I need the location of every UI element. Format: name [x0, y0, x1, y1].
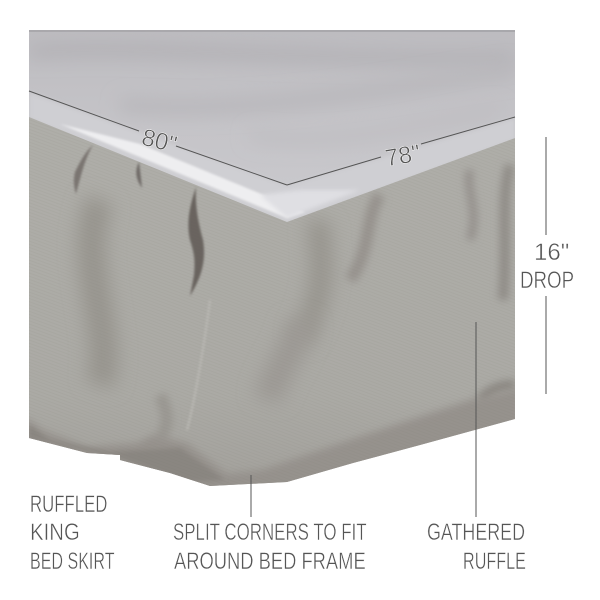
hem shadow [29, 390, 515, 486]
label: ruffled king bed skirt [30, 491, 115, 575]
white sheet hem [30, 94, 514, 172]
measurement: 80 inch width: 80" [139, 124, 180, 159]
measurement: 80 inch width [29, 91, 287, 185]
panel: gray gathered bed skirt [20, 110, 520, 500]
callout: split corners [173, 475, 367, 575]
label: ruffled king bed skirt: KING [30, 518, 80, 545]
measurement: 78 inch length [287, 117, 515, 185]
gather folds [74, 145, 515, 440]
measurement: 16 inch drop [520, 137, 574, 394]
callout: split corners: AROUND BED FRAME [174, 548, 366, 575]
measurement: 16 inch drop: DROP [520, 267, 574, 294]
label: ruffled king bed skirt: RUFFLED [30, 491, 107, 518]
measurement: 16 inch drop: 16" [534, 239, 569, 266]
measurement: 78 inch length: 78" [383, 140, 423, 172]
callout: gathered ruffle [427, 322, 526, 575]
callout: gathered ruffle: GATHERED [427, 520, 525, 546]
callout: gathered ruffle: RUFFLE [463, 548, 526, 575]
photo: bed sheet top [29, 30, 515, 230]
callout: split corners: SPLIT CORNERS TO FIT [173, 519, 367, 546]
label: ruffled king bed skirt: BED SKIRT [30, 549, 115, 575]
